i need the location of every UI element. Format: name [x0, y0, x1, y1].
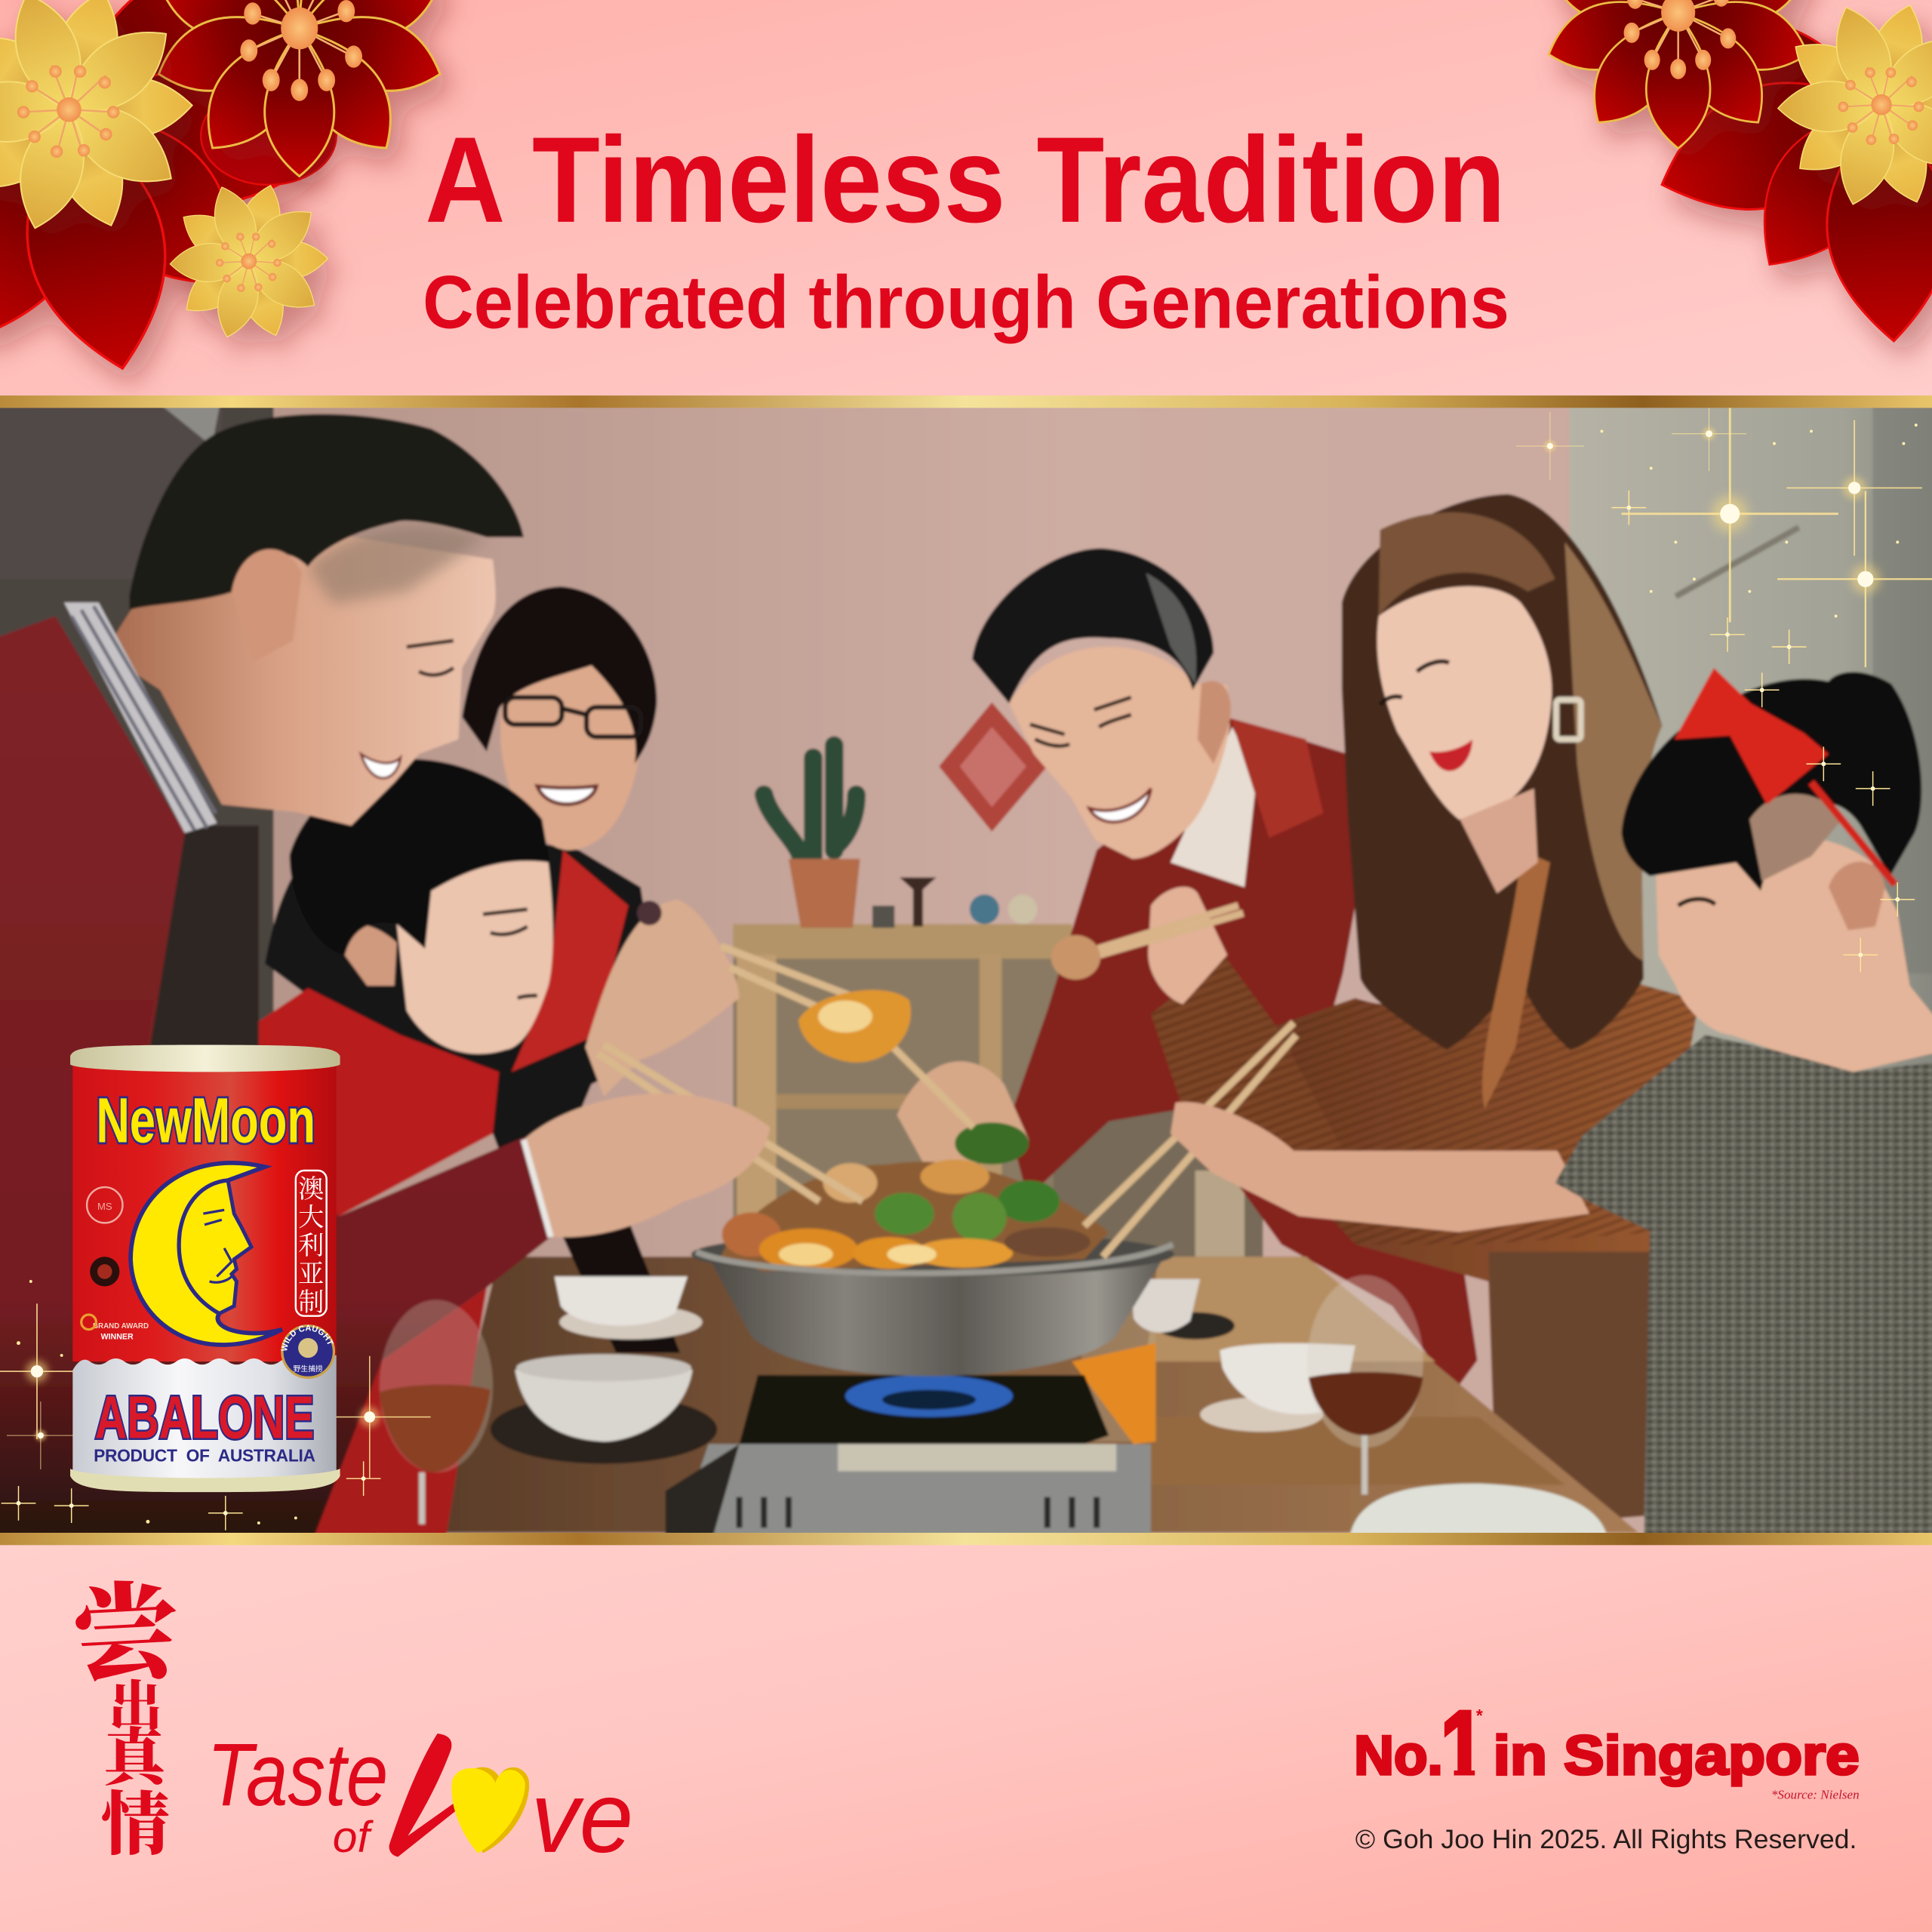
taste of love logo — [207, 1725, 633, 1874]
chinese calligraphy slogan: 尝 — [69, 1546, 183, 1704]
letter L — [389, 1734, 458, 1857]
abalone held in chopsticks — [798, 990, 911, 1063]
decoration: right flower cluster — [1539, 0, 1932, 344]
moon logo — [131, 1163, 282, 1345]
chinese product label: 大 — [298, 1196, 324, 1233]
copyright: © Goh Joo Hin 2025. All Rights Reserved. — [1355, 1825, 1857, 1854]
of: of — [333, 1813, 374, 1862]
chopsticks — [598, 946, 1297, 1257]
source note: *Source: Nielsen — [1771, 1788, 1860, 1802]
abalone can — [69, 1044, 340, 1493]
photo background: wall and room — [0, 394, 1932, 1552]
panel: bottom footer background — [0, 1540, 1932, 1932]
chinese product label: 澳 — [298, 1168, 324, 1205]
grandmother's black sleeve — [561, 1220, 680, 1353]
chinese product label: 利 — [298, 1225, 324, 1262]
chinese product label: 制 — [298, 1281, 324, 1318]
can body: white label — [72, 1355, 337, 1478]
chinese calligraphy slogan: 出 — [109, 1663, 163, 1741]
brand name: NewMoon — [96, 1084, 315, 1155]
bowls and plates — [491, 1276, 1608, 1540]
wine glasses — [380, 1275, 1423, 1524]
glass of orange juice — [1072, 1303, 1155, 1444]
chinese product label — [296, 1168, 327, 1318]
certification badges — [82, 1187, 149, 1342]
taste: Taste — [207, 1725, 388, 1824]
grandmother — [264, 585, 740, 1150]
can body: red label — [72, 1062, 337, 1361]
gold divider bottom — [0, 1533, 1932, 1545]
food in the pot — [696, 1122, 1173, 1273]
decoration: left flower cluster — [0, 0, 451, 383]
ve: ve — [531, 1761, 633, 1874]
sparkles: around the can — [0, 1280, 431, 1531]
in singapore: in Singapore — [1494, 1724, 1860, 1786]
cactus in terracotta pot — [764, 746, 860, 928]
grandson — [259, 759, 553, 1552]
chinese calligraphy slogan: 情 — [101, 1770, 170, 1869]
gold divider top — [0, 395, 1932, 408]
shelf ornaments — [872, 877, 1038, 928]
chinese calligraphy slogan: 真 — [103, 1709, 176, 1798]
no.1 claim — [1354, 1690, 1860, 1805]
numeral 1: 1 — [1441, 1690, 1484, 1805]
certification badges: BRAND AWARD — [93, 1322, 149, 1331]
mother — [1051, 494, 1699, 1527]
grandfather — [0, 414, 770, 1552]
young daughter — [1171, 668, 1932, 1552]
table — [431, 1257, 1638, 1533]
wild caught badge: 野生捕捞 — [294, 1364, 323, 1374]
can rim: bottom — [70, 1469, 340, 1492]
silver hotpot — [691, 1232, 1174, 1377]
panel: top header background — [0, 0, 1932, 397]
title: A Timeless Tradition — [425, 112, 1506, 248]
chinese calligraphy slogan — [69, 1546, 183, 1869]
shelf — [733, 924, 1263, 1257]
subtitle: Celebrated through Generations — [423, 260, 1509, 344]
certification badges: MS — [97, 1201, 112, 1212]
certification badges: WINNER — [101, 1333, 134, 1342]
chinese product label: 亚 — [298, 1254, 324, 1291]
wall decoration: red paper cut — [939, 703, 1048, 832]
heart — [451, 1767, 529, 1854]
no.: No. — [1354, 1724, 1443, 1786]
stove with blue flame — [666, 1375, 1151, 1552]
photo: family sharing a pot of abalone — [0, 394, 1932, 1552]
sparkles: window light — [1516, 396, 1932, 972]
can rim: top — [70, 1044, 340, 1072]
young father — [897, 549, 1478, 1392]
wild caught badge — [281, 1324, 335, 1379]
wild caught badge: WILD CAUGHT — [281, 1325, 334, 1351]
asterisk: * — [1476, 1706, 1483, 1725]
abalone wordmark: ABALONE — [95, 1383, 314, 1451]
product of australia: PRODUCT OF AUSTRALIA — [94, 1445, 315, 1465]
